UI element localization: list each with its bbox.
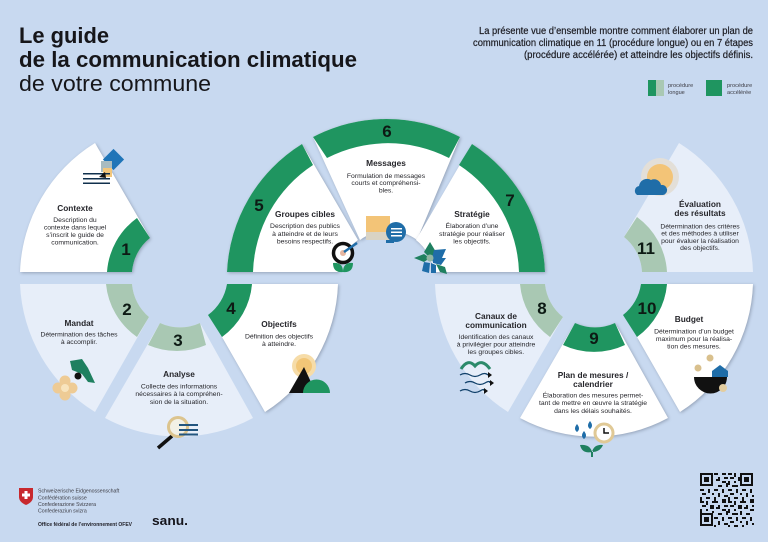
QR code [700, 473, 754, 527]
text: Evaluation: Détermination des critères [660, 224, 740, 230]
icon: Swiss shield [19, 488, 33, 505]
legend: long procedure: longue [668, 90, 685, 96]
panel: 8 Canaux de communication [435, 284, 563, 412]
text: Plan de mesures [539, 390, 647, 415]
intro text [473, 26, 753, 61]
panel: 6 Messages [313, 119, 460, 243]
text: federal names: Confédération suisse [38, 496, 87, 502]
heading: Canaux de communication: communication [465, 320, 527, 330]
panel: 9 Plan de mesures [520, 323, 668, 457]
panel: 1 Contexte [20, 143, 150, 272]
text: Analyse: nécessaires à la compréhen- [135, 391, 223, 398]
panel: 7 Stratégie [414, 144, 545, 274]
text: Stratégie [439, 221, 506, 246]
text: Contexte: Description du [53, 217, 97, 224]
number 8: 8 [537, 299, 547, 318]
text: federal names: Confederazione Svizzera [38, 502, 96, 508]
text: federal office: Office fédéral de l’environnement OFEV [38, 522, 133, 528]
text: Mandat [40, 332, 118, 346]
text: Messages: courts et compréhensi- [351, 180, 421, 187]
text: Contexte: communication. [51, 240, 99, 246]
icon: sun and cloud [635, 158, 679, 196]
text: Canaux [457, 334, 536, 356]
text: Evaluation [660, 224, 740, 252]
text: Messages: Formulation de messages [347, 173, 426, 180]
number 3: 3 [173, 331, 183, 350]
panel: 10 Budget [623, 284, 753, 412]
logo: sanu: sanu. [152, 513, 188, 528]
text: Analyse [135, 384, 223, 406]
heading: Mandat: Mandat [64, 318, 94, 328]
heading: Evaluation: Évaluation [679, 199, 721, 209]
text: Groupes cibles [270, 223, 341, 246]
text: Budget [654, 328, 734, 350]
number 10: 10 [638, 299, 656, 318]
text: Contexte: s’inscrit le guide de [46, 232, 104, 239]
logo: Swiss Confederation [19, 488, 133, 528]
number 9: 9 [589, 329, 599, 348]
text: federal names: Schweizerische Eidgenossenschaft [38, 488, 120, 494]
legend: fast procedure: accélérée [727, 90, 751, 96]
panel: 11 Evaluation [624, 143, 753, 272]
text: Messages [347, 173, 426, 194]
text: Evaluation: des objectifs. [680, 245, 720, 252]
title [19, 23, 357, 96]
text: Canaux: les groupes cibles. [468, 349, 524, 356]
text: Evaluation: et des méthodes à utiliser [661, 230, 739, 238]
text: Contexte: contexte dans lequel [44, 224, 107, 232]
number 5: 5 [254, 196, 264, 215]
text: Budget: maximum pour la réalisa- [656, 336, 732, 343]
icon: target and plant [333, 243, 357, 272]
panel: 5 Groupes cibles [227, 144, 358, 272]
text: Evaluation: pour évaluer la réalisation [661, 238, 739, 245]
heading: Stratégie: Stratégie [454, 209, 490, 219]
text: Mandat: à accomplir. [61, 339, 97, 346]
heading: Contexte: Contexte [57, 203, 93, 213]
text: Canaux: à privilégier pour atteindre [457, 342, 536, 348]
icon: bowl and coins [694, 354, 728, 394]
text: Contexte [44, 217, 107, 246]
heading: Analyse: Analyse [163, 369, 195, 379]
text: Objectifs: à atteindre. [262, 341, 296, 348]
text: Groupes cibles: Description des publics [270, 223, 341, 230]
text: federal names: Confederaziun svizra [38, 508, 87, 514]
heading: Plan de mesures [558, 370, 629, 389]
text: Canaux: Identification des canaux [459, 334, 534, 341]
number 6: 6 [382, 122, 392, 141]
icon: magnifier [158, 418, 198, 448]
intro text: communication climatique en 11 (procédure longue) ou en 7 étapes [473, 38, 753, 49]
panel: 2 Mandat [20, 284, 149, 412]
heading: Canaux de communication [465, 311, 527, 330]
text: Stratégie: Élaboration d’une [446, 221, 499, 230]
number 7: 7 [505, 191, 515, 210]
text: Plan de mesures: dans les délais souhaités. [554, 408, 632, 415]
heading: Groupes cibles: Groupes cibles [275, 209, 335, 219]
text: Budget: tion des mesures. [667, 344, 721, 350]
text: Mandat: Détermination des tâches [40, 332, 118, 338]
panel: 4 Objectifs [208, 284, 338, 412]
icon: waves [460, 363, 494, 394]
title: de votre commune [19, 71, 211, 96]
icon: flower and insect [52, 359, 95, 400]
text: Stratégie: stratégie pour réaliser [439, 231, 506, 238]
legend [648, 80, 752, 96]
intro text: La présente vue d’ensemble montre comment élaborer un plan de [479, 26, 753, 37]
number 1: 1 [121, 240, 131, 259]
text: Objectifs: Définition des objectifs [245, 334, 314, 340]
legend: fast procedure: procédure [727, 83, 752, 89]
text: Plan de mesures: tant de mettre en œuvre la stratégie [539, 400, 647, 407]
heading: Canaux de communication: Canaux de [475, 311, 517, 321]
legend: fast procedure [706, 80, 752, 96]
heading: Budget: Budget [675, 314, 704, 324]
text: Stratégie: les objectifs. [453, 238, 491, 246]
heading: Plan de mesures: Plan de mesures / [558, 370, 629, 380]
icon: drops, clock and plant [575, 421, 613, 457]
heading: Evaluation: des résultats [674, 208, 726, 218]
heading: Evaluation [674, 199, 726, 218]
number 2: 2 [122, 300, 132, 319]
text: Plan de mesures: Élaboration des mesures permet- [543, 390, 643, 400]
text: federal names [38, 488, 120, 514]
text: Analyse: sion de la situation. [150, 399, 208, 406]
text: Objectifs [245, 334, 314, 348]
text: Groupes cibles: à atteindre et de leurs [272, 231, 338, 238]
icon: mountain and sun [289, 354, 330, 393]
heading: Messages: Messages [366, 158, 406, 168]
number 11: 11 [637, 239, 655, 258]
title: de la communication climatique [19, 47, 357, 72]
heading: Plan de mesures: calendrier [573, 379, 614, 389]
text: Groupes cibles: besoins respectifs. [277, 238, 333, 246]
text: Messages: bles. [379, 188, 393, 194]
icon: envelope and speech bubble [366, 216, 406, 243]
icon: flower [414, 242, 447, 274]
number 4: 4 [226, 299, 236, 318]
legend: long procedure: procédure [668, 83, 693, 89]
title: Le guide [19, 23, 109, 48]
heading: Objectifs: Objectifs [261, 319, 297, 329]
text: Analyse: Collecte des informations [141, 384, 218, 390]
legend: long procedure [648, 80, 693, 96]
panel: 3 Analyse [105, 323, 253, 448]
icon: document and diamond [83, 149, 124, 184]
intro text: (procédure accélérée) et atteindre les objectifs définis. [524, 50, 753, 61]
text: Budget: Détermination d’un budget [654, 328, 734, 336]
